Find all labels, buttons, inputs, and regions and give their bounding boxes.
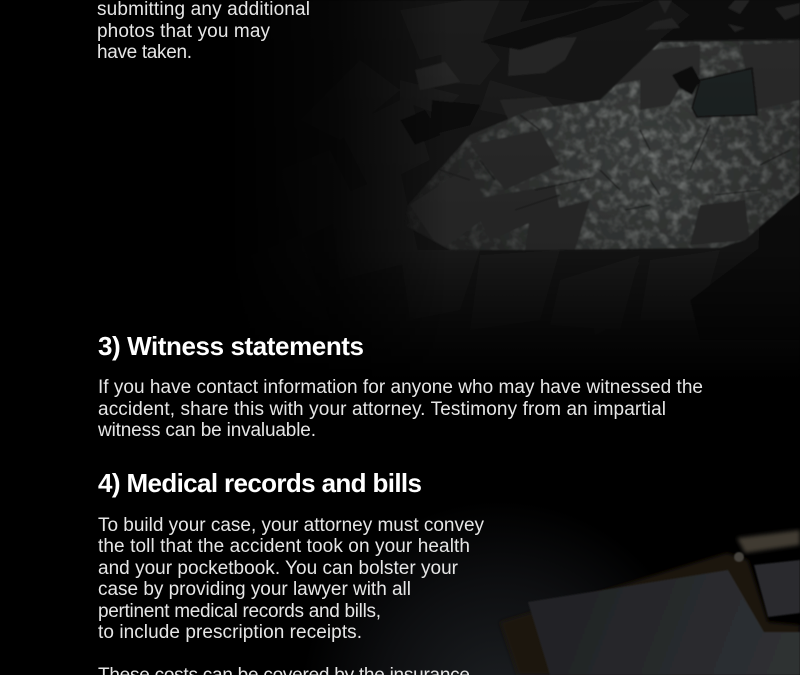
lower small shards: [430, 262, 690, 335]
text block: medical records: to include prescription receipts.: [98, 622, 362, 643]
text block: medical records: pertinent medical records and bills,: [98, 601, 381, 622]
heading: witness statements: 3) Witness statements: [98, 331, 364, 361]
upper dark shards: [418, 40, 533, 113]
text block: photos paragraph ending: have taken.: [97, 42, 192, 63]
clip highlight: [734, 552, 744, 562]
lower glow: [200, 480, 800, 675]
heading: medical records and bills: 4) Medical records and bills: [98, 468, 422, 498]
text block: witness statements: witness can be invaluable.: [97, 420, 316, 441]
text block: medical records: the toll that the accident took on your health: [98, 536, 470, 557]
clip lower plate: [754, 560, 800, 617]
small shards on the dark top edge: [645, 0, 800, 32]
shattered glass photo: [344, 0, 800, 334]
paper sheet: [528, 570, 800, 675]
text block: witness statements: If you have contact information for anyone who may have witnessed the: [98, 377, 703, 398]
text block: medical records: and your pocketbook. You can bolster your: [98, 558, 459, 579]
text block: medical records: [98, 515, 484, 643]
text block: medical records: To build your case, your attorney must convey: [98, 515, 484, 536]
text block: photos paragraph ending: [97, 0, 310, 63]
clipboard photo: [200, 480, 800, 675]
text block: medical records: case by providing your lawyer with all: [98, 579, 411, 600]
bright crushed glass patch: [409, 40, 800, 250]
text block: witness statements: accident, share this with your attorney. Testimony from an impartial: [98, 399, 666, 420]
dark rectangular shard: [692, 68, 757, 117]
black gaps between shards: [401, 0, 800, 296]
text block: witness statements: [97, 377, 703, 441]
soft wedge shape behind text: [200, 320, 295, 480]
hole in the glass: [672, 66, 700, 95]
wooden clipboard edge: [500, 553, 800, 675]
metal clip base: [737, 530, 800, 553]
text block: photos paragraph ending: photos that you may: [97, 21, 270, 42]
